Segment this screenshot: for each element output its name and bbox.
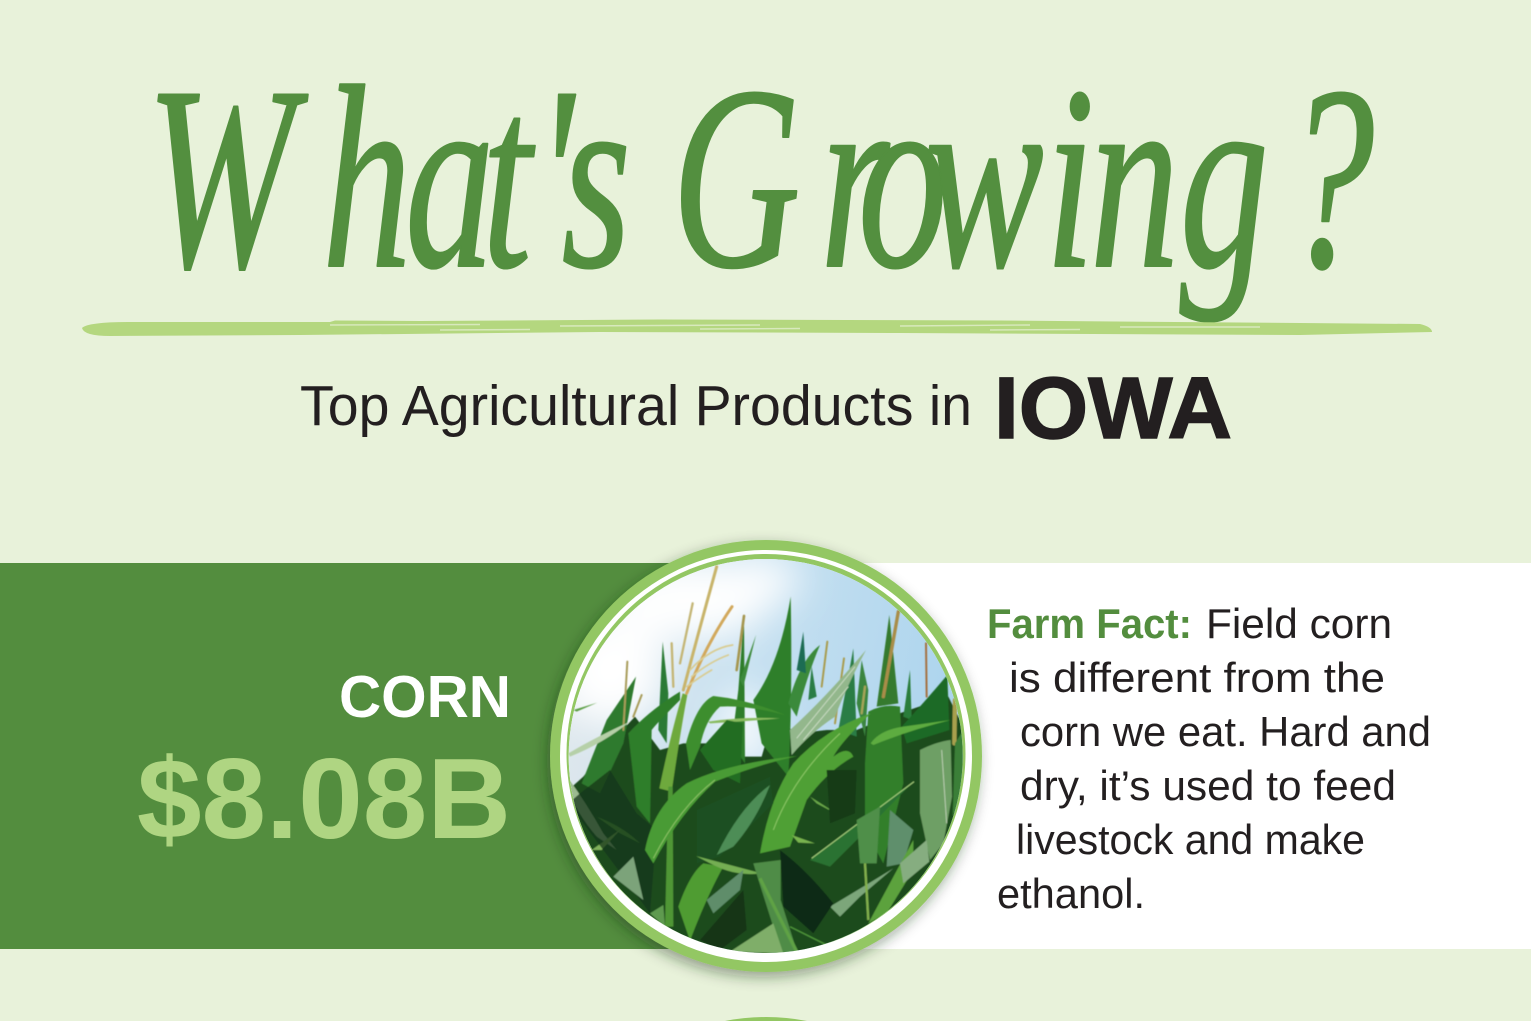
pale ribbed leaf — [790, 650, 866, 755]
long horizontal leaf — [645, 756, 797, 863]
big bright leaf — [760, 713, 871, 853]
corn panel right white band — [766, 563, 1531, 949]
centre-lower darks — [697, 777, 773, 863]
arching leaves — [686, 696, 786, 770]
farm fact lead-in: Farm Fact: — [987, 600, 1192, 647]
farm fact line 5: livestock and make — [1016, 816, 1365, 863]
lower centre leaves — [678, 863, 723, 941]
farm fact line 4: dry, it’s used to feed — [1020, 762, 1396, 809]
far background mass — [568, 697, 965, 955]
corn panel left green band — [0, 563, 766, 949]
state name: IOWA: IOWA — [994, 360, 1232, 457]
right leaves — [871, 720, 951, 745]
corn value: $8.08B — [137, 736, 511, 863]
photo ring — [550, 540, 982, 972]
corn photo illustration — [555, 550, 972, 962]
tassels — [623, 567, 955, 743]
title: What's Growing? — [146, 33, 1374, 323]
farm fact line 6: ethanol. — [997, 870, 1145, 917]
corn label: CORN — [339, 664, 511, 730]
farm fact line 3: corn we eat. Hard and — [1020, 708, 1431, 755]
photo: corn field in ring — [550, 540, 982, 972]
farm fact line 1: Field corn — [1206, 600, 1392, 647]
brush underline — [82, 320, 1432, 336]
subtitle: Top Agricultural Products in — [300, 374, 972, 438]
left leaves — [628, 692, 680, 823]
farm fact line 2: is different from the — [1009, 654, 1385, 701]
panel: corn — [0, 540, 1531, 972]
main stalk — [659, 693, 687, 792]
farm fact text — [987, 600, 1431, 917]
distant blades — [582, 677, 636, 793]
next panel ring peeking at bottom — [725, 1017, 807, 1021]
